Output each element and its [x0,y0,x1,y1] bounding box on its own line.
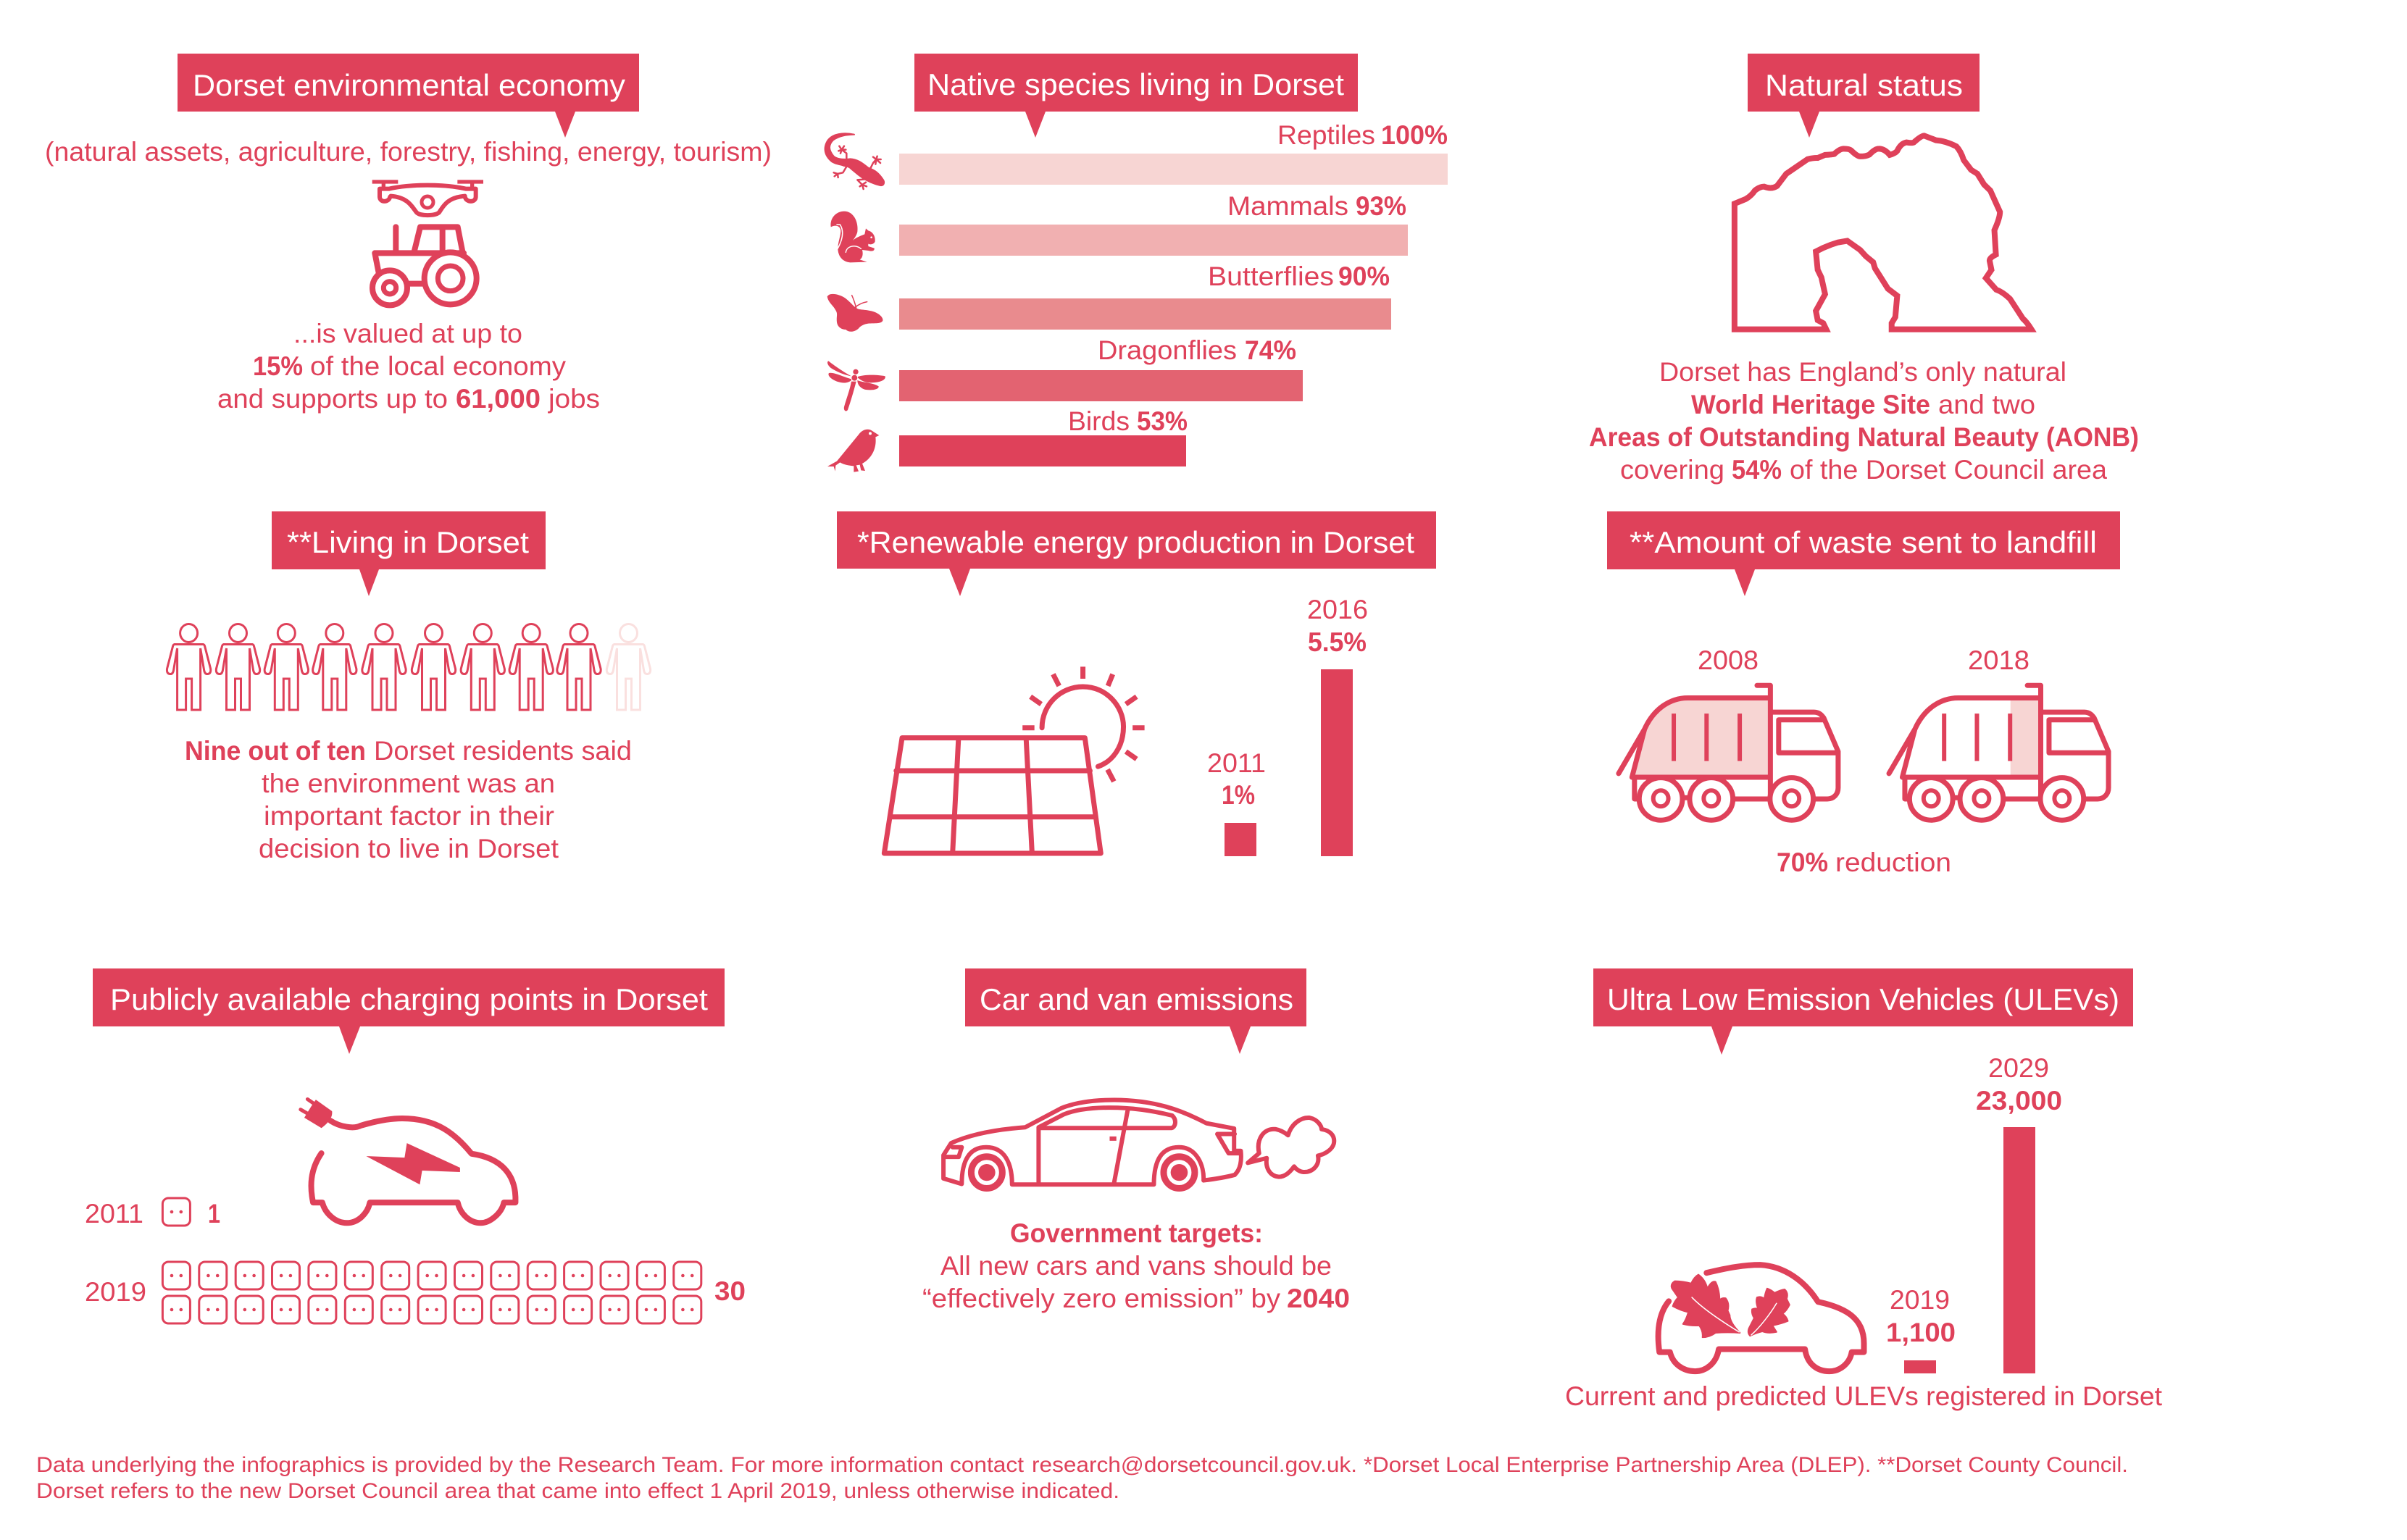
icon row: nine of ten people [167,624,651,710]
row: charging points 2019: 30 [714,1276,746,1306]
icon: solar panel and sun [884,666,1145,853]
heading: Natural status: Natural status [1765,68,1963,102]
text: value of the environmental economy: and supports up to [217,384,448,414]
heading: waste to landfill: **Amount of waste sent to landfill [1630,525,2097,559]
row: charging points 2019: 2019 [85,1277,146,1307]
footer: data sources and notes: research@dorsetcouncil.gov.uk. [1032,1453,1357,1477]
bar: dragonflies 74%: 74% [1245,335,1296,365]
text: World Heritage Site and AONB: 54% [1732,455,1782,485]
bar chart: ULEVs registered [1886,1053,2062,1373]
bar: mammals 93%: Mammals [1227,191,1348,221]
text: nine out of ten: Nine out of ten [185,736,366,766]
text: nine out of ten: Dorset residents said [374,736,632,766]
text: World Heritage Site and AONB: Areas of Outstanding Natural Beauty (AONB) [1589,422,2139,452]
text: World Heritage Site and AONB: and two [1938,390,2035,419]
heading: Living in Dorset: **Living in Dorset [287,525,529,559]
icon: gecko [825,133,884,189]
bar: butterflies 90%: Butterflies [1208,261,1334,291]
bar: dragonflies 74% [899,335,1303,401]
text: government targets: Government targets: [1010,1218,1263,1248]
bar: reptiles 100%: 100% [1381,120,1448,150]
bar: 2029 23,000: 23,000 [1976,1086,2062,1116]
bar: birds 53% [899,406,1188,466]
text: government targets: “effectively zero emission” by [922,1284,1281,1313]
heading: ULEVs: Ultra Low Emission Vehicles (ULEVs) [1607,982,2119,1016]
icon: car with exhaust cloud [943,1100,1334,1189]
panel: Publicly available charging points [85,968,746,1323]
bar: reptiles 100%: Reptiles [1277,120,1375,150]
bar: 2019 1,100: 2019 [1890,1285,1950,1315]
row: charging points 2019 [85,1262,746,1323]
bar: 2029 23,000 [1976,1053,2062,1373]
heading: charging points: Publicly available charging points in Dorset [110,982,708,1016]
heading: Renewable energy production [837,511,1436,596]
heading: Dorset environmental economy: Dorset environmental economy [193,68,625,102]
panel: Ultra Low Emission Vehicles [1565,968,2163,1411]
panel: Living in Dorset [167,511,651,863]
text: value of the environmental economy: ...is valued at up to [293,319,522,348]
bar: birds 53%: Birds [1068,406,1130,436]
icon: bird [827,430,879,472]
row: charging points 2011: 2011 [85,1199,143,1229]
bar: birds 53%: 53% [1137,406,1188,436]
heading: waste to landfill [1607,511,2120,596]
text: World Heritage Site and AONB: covering [1620,455,1724,485]
text: World Heritage Site and AONB [1589,357,2139,485]
panel: Car and van emissions [922,968,1350,1313]
heading: Living in Dorset [272,511,546,596]
bar: 2019 1,100 [1886,1285,1956,1373]
icon: truck 2018 [1889,685,2108,820]
bar chart: renewable share [1207,595,1368,856]
bar: mammals 93%: 93% [1356,191,1406,221]
icon: butterfly [827,294,883,332]
icon: car with oak leaves [1659,1265,1864,1371]
heading: Renewable energy production: *Renewable energy production in Dorset [857,525,1414,559]
label: 2008: 2008 [1698,645,1759,675]
icon: drone [372,180,483,215]
heading: car and van emissions: Car and van emissions [980,982,1293,1016]
text: government targets [922,1218,1350,1313]
map: Dorset Council area outline [1735,135,2032,330]
footer: data sources and notes [36,1453,2128,1503]
heading: Natural status [1748,54,1980,138]
icon: squirrel [830,212,875,262]
icon: dragonfly [827,361,885,411]
bar: butterflies 90% [899,261,1391,330]
heading: car and van emissions [965,968,1306,1054]
heading: Dorset environmental economy [178,54,639,138]
text: 70% reduction: reduction [1835,848,1951,877]
heading: ULEVs [1593,968,2133,1055]
bar: 2011 1% [1207,748,1266,856]
bar: 2011 1%: 1% [1222,780,1255,810]
panel: Amount of waste sent to landfill [1607,511,2120,877]
bar: 2016 5.5%: 2016 [1307,595,1368,624]
panel: Renewable energy production [837,511,1436,856]
text: nine out of ten: decision to live in Dorset [259,834,559,863]
text: value of the environmental economy: jobs [548,384,600,414]
bar: butterflies 90%: 90% [1338,261,1390,291]
bar: reptiles 100% [899,120,1448,185]
bar: dragonflies 74%: Dragonflies [1098,335,1237,365]
row: charging points 2011: 1 [208,1199,220,1229]
text: World Heritage Site and AONB: World Heritage Site [1691,390,1930,419]
footer: data sources and notes: Data underlying the infographics is provided by the Research Team. For more information contact [36,1453,1025,1477]
panel: Native species living in Dorset [825,54,1448,472]
bar: 2029 23,000: 2029 [1988,1053,2049,1083]
icon: truck 2008 [1619,685,1838,820]
caption: ULEVs registered: Current and predicted ULEVs registered in Dorset [1565,1381,2163,1411]
text: value of the environmental economy [217,319,600,414]
heading: Native species [914,54,1358,138]
text: 70% reduction: 70% [1777,848,1828,877]
bar: 2016 5.5%: 5.5% [1308,627,1367,657]
label: 2018: 2018 [1968,645,2030,675]
heading: charging points [93,968,725,1054]
heading: Native species: Native species living in Dorset [927,67,1344,101]
text: value of the environmental economy: 61,000 [456,384,541,414]
text: nine out of ten [185,736,632,863]
bar: 2019 1,100: 1,100 [1886,1318,1956,1347]
footer: data sources and notes: *Dorset Local Enterprise Partnership Area (DLEP). **Dorset County Council. [1364,1453,2128,1477]
bar: 2016 5.5% [1307,595,1368,856]
icon: electric car with plug [301,1099,515,1223]
text: value of the environmental economy: of the local economy [310,351,567,381]
text: value of the environmental economy: 15% [253,351,303,381]
text: World Heritage Site and AONB: of the Dorset Council area [1790,455,2107,485]
icon: tractor [372,227,477,305]
text: nine out of ten: the environment was an [262,769,555,798]
text: 70% reduction [1777,848,1951,877]
panel: Dorset environmental economy [45,54,772,414]
text: government targets: 2040 [1287,1284,1350,1313]
text: nine out of ten: important factor in their [264,801,554,831]
panel: Natural status [1589,54,2139,485]
text: government targets: All new cars and vans should be [940,1251,1332,1281]
row: charging points 2011 [85,1198,220,1229]
bar: mammals 93% [899,191,1408,256]
text: list of sectors: (natural assets, agriculture, forestry, fishing, energy, tourism) [45,137,772,167]
footer: data sources and notes: Dorset refers to the new Dorset Council area that came into effect 1 April 2019, unless otherwise indicated. [36,1479,1119,1503]
text: World Heritage Site and AONB: Dorset has England’s only natural [1659,357,2066,387]
bar chart: species percentages [899,120,1448,466]
bar: 2011 1%: 2011 [1207,748,1266,778]
